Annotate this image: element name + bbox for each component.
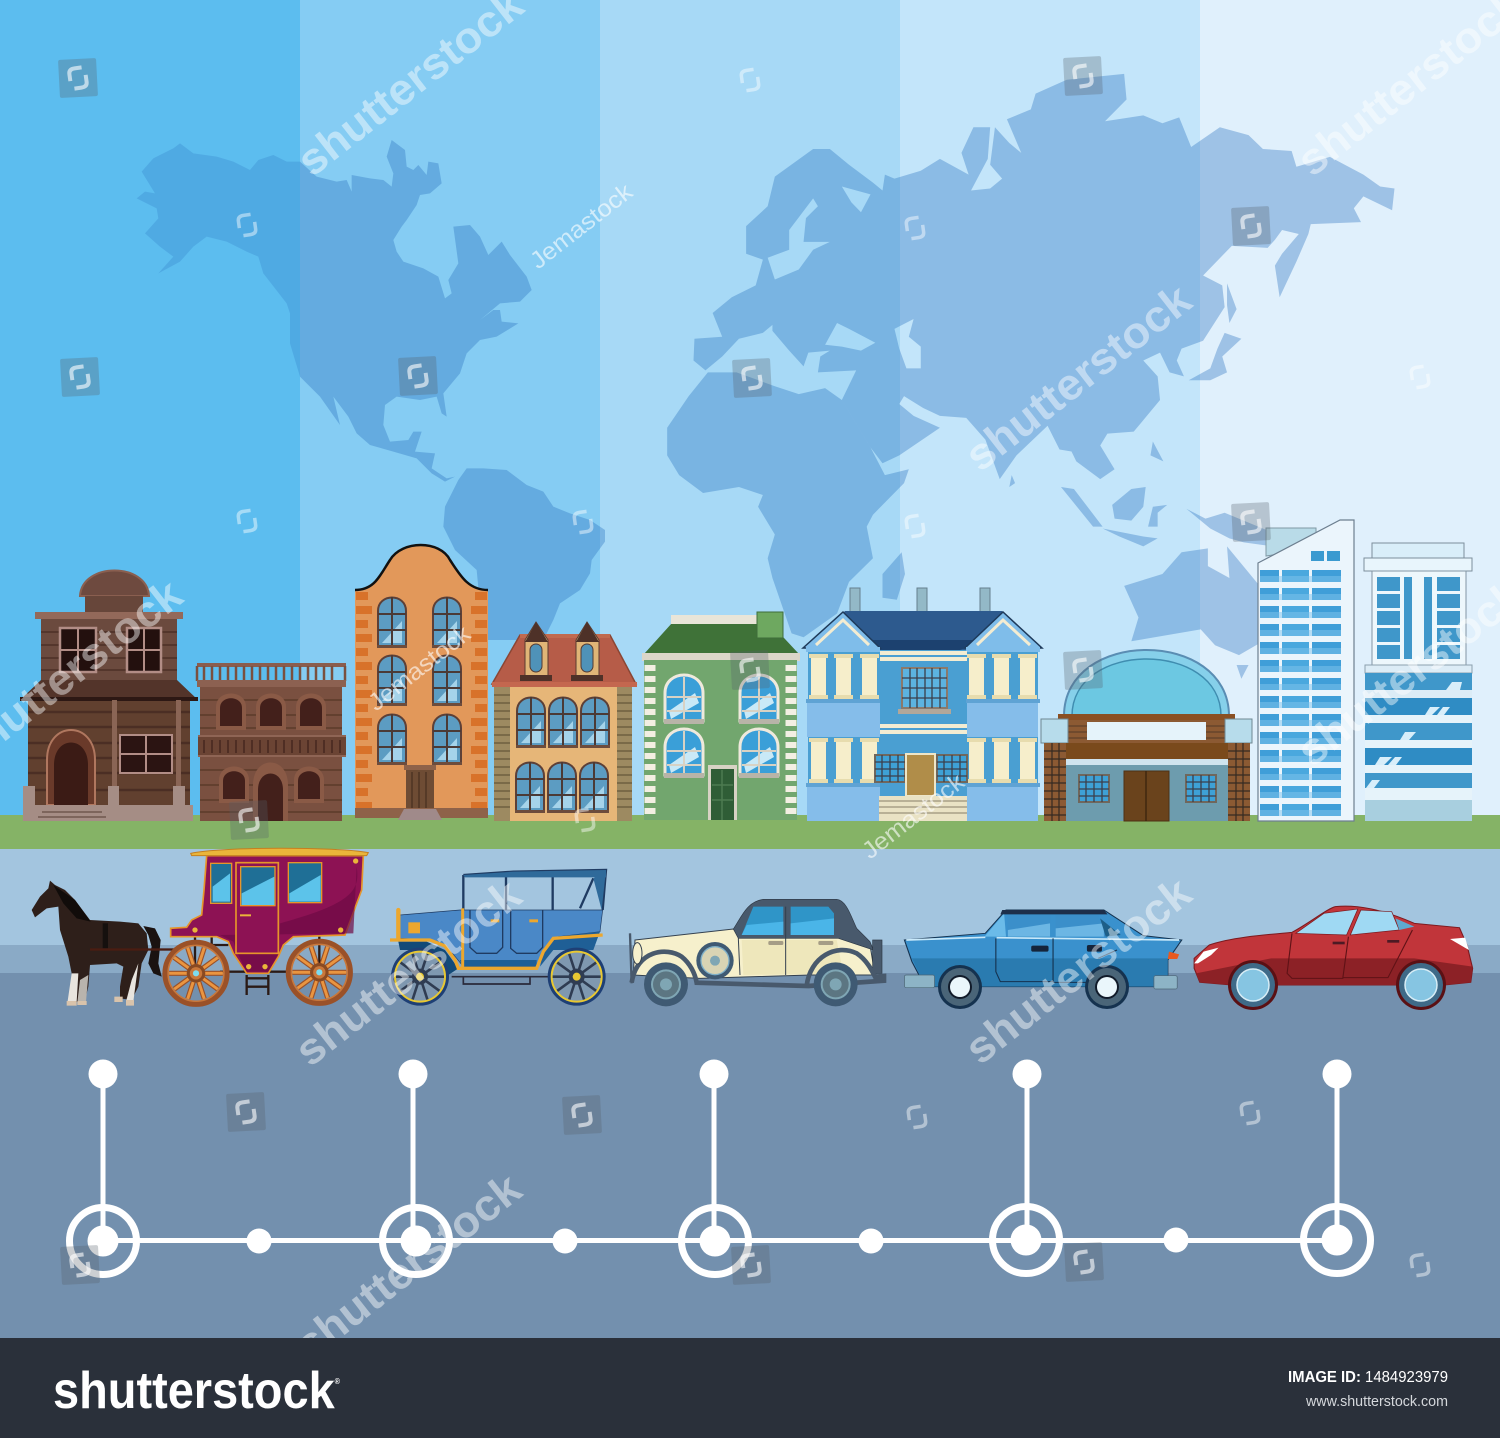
map: islands [883, 283, 1272, 679]
watermark overlays: Jemastock [857, 768, 971, 865]
map: south america [443, 468, 605, 640]
footer bar [0, 1338, 1500, 1438]
building 1: wooden saloon [20, 570, 198, 821]
building 2: brown balcony house [197, 663, 346, 821]
map: eurasia [693, 74, 1394, 479]
vehicle: horse [32, 881, 175, 1006]
grass strip [0, 815, 1500, 849]
road [0, 849, 1500, 1338]
watermark overlays: shutterstock [956, 867, 1201, 1074]
building 5: green house [642, 612, 800, 820]
timeline [70, 1060, 1370, 1274]
footer: website: www.shutterstock.com [1305, 1393, 1448, 1410]
footer: image id: IMAGE ID: 1484923979 [1288, 1369, 1448, 1386]
vehicle: blue sedan [904, 910, 1182, 1009]
background: five era panels [0, 0, 1500, 850]
building 4: mansard townhouse [492, 622, 637, 821]
timeline: horizontal axis [103, 1238, 1337, 1243]
map: north america [137, 140, 532, 482]
timeline: top dots [88, 1060, 1352, 1088]
watermark overlays: Jemastock [363, 620, 477, 717]
watermark overlays: shutterstock [286, 1163, 531, 1370]
footer: shutterstock logo: shutterstock [53, 1362, 365, 1420]
building 3: orange gabled tower [355, 545, 488, 820]
watermark overlays: shutterstock [956, 274, 1201, 481]
building 6: blue victorian mansion [803, 588, 1042, 821]
map: australia [1124, 546, 1263, 655]
footer: shutterstock logo: ® [335, 1377, 340, 1386]
timeline: ringed nodes [70, 1206, 1370, 1274]
watermark icons [58, 56, 1429, 1285]
timeline: small midpoints [246, 1228, 1188, 1254]
watermark overlays: shutterstock [286, 869, 531, 1076]
building 8: white slanted skyscraper [1258, 520, 1354, 821]
vehicle: red modern car [1194, 906, 1473, 1010]
timeline: vertical stems [100, 1074, 1340, 1240]
world map [137, 74, 1394, 679]
building 7: domed hall [1041, 650, 1252, 821]
watermark overlays: Jemastock [525, 178, 639, 275]
vehicle: blue vintage open-top car [390, 870, 606, 1006]
map: africa [667, 372, 909, 637]
building 9: blue striped office tower [1364, 543, 1472, 821]
vehicle: purple horse carriage [165, 848, 368, 1004]
vehicle: cream classic car [630, 899, 884, 1006]
